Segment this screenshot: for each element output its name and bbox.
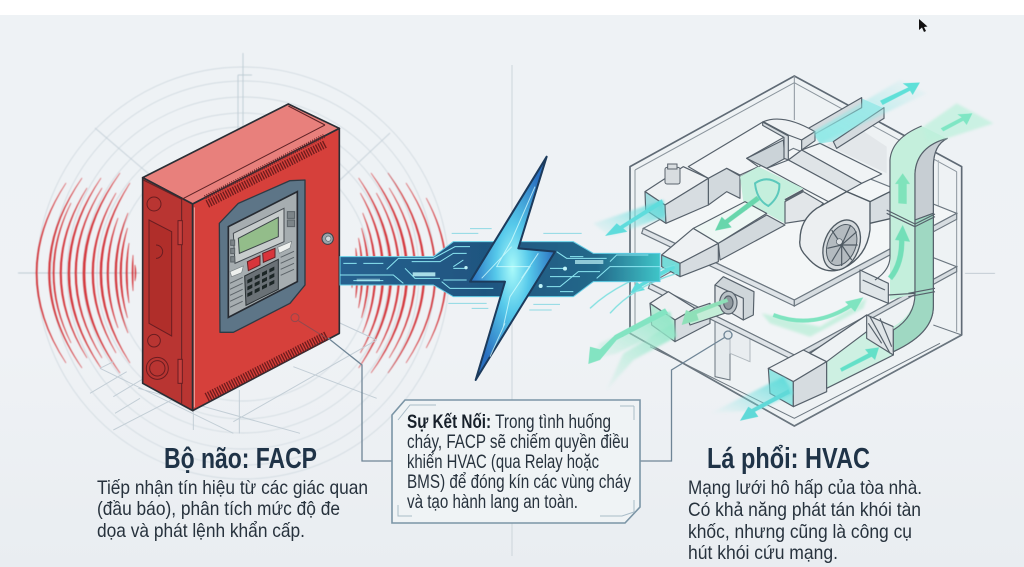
fire alarm control panel (FACP) [90, 104, 377, 433]
right description: Mạng lưới hô hấp của tòa nhà. [688, 477, 922, 499]
middle green duct section [740, 167, 823, 223]
lightning bolt [470, 157, 555, 380]
airflow arrows [588, 82, 972, 421]
white indicator pads [230, 241, 292, 277]
upper floor slab [642, 148, 957, 306]
side guide tick [965, 272, 995, 275]
right heading: HVAC: Lá phổi: HVAC [707, 443, 870, 475]
connector start [291, 314, 327, 338]
cabinet edge details [143, 106, 325, 407]
right description: Có khả năng phát tán khói tàn [688, 499, 921, 521]
spark dashes [448, 229, 582, 310]
side knockouts and label plate [146, 197, 182, 383]
damper and green ducts lower right [768, 270, 893, 407]
blower fan [800, 192, 892, 276]
bezel [219, 180, 305, 332]
keypad [245, 259, 278, 305]
vents [205, 136, 327, 397]
lower damper box and tube [650, 277, 754, 342]
main duct run on top [688, 122, 882, 205]
left description: (đầu báo), phân tích mức độ đe [97, 498, 340, 520]
supply duct center left [662, 202, 785, 277]
blueprint radar rings behind panel [18, 53, 449, 479]
isometric HVAC building [588, 76, 995, 426]
floor grid under panel [90, 317, 377, 433]
right description: khốc, nhưng cũng là công cụ [688, 521, 912, 543]
callout text: khiển HVAC (qua Relay hoặc [407, 452, 599, 473]
bottom floor and wall column [630, 320, 962, 426]
inner faceplate [228, 192, 297, 317]
red signal waves right [352, 173, 447, 373]
teal damper ring [755, 179, 779, 206]
red signal waves left [36, 173, 136, 373]
left description: Tiếp nhận tín hiệu từ các giác quan [97, 477, 368, 499]
upper-right outlet duct [763, 98, 884, 150]
right description: hút khói cứu mạng. [688, 542, 838, 564]
circuit traces [340, 247, 660, 292]
top-left exhaust duct [645, 167, 708, 223]
status slats [230, 212, 295, 307]
top face [143, 104, 339, 204]
left description: dọa và phát lệnh khẩn cấp. [97, 520, 305, 542]
left heading: FACP: Bộ não: FACP [164, 443, 317, 475]
control interface [219, 180, 305, 332]
LCD screen [238, 217, 278, 253]
mouse cursor [919, 19, 928, 32]
green and teal airflow swooshes [590, 80, 993, 413]
motor on duct [665, 164, 680, 184]
left description [97, 477, 368, 542]
callout text: và tạo hành lang an toàn. [407, 492, 578, 513]
middle floor slab [648, 203, 957, 361]
vertical green riser duct [875, 126, 947, 352]
callout text: cháy, FACP sẽ chiếm quyền điều [407, 432, 629, 453]
door lock [322, 233, 333, 244]
red buttons [247, 248, 275, 271]
left side face [143, 178, 193, 411]
callout text: BMS) để đóng kín các vùng cháy [407, 472, 631, 493]
connection data band [340, 229, 660, 310]
center vertical guide line [511, 65, 513, 556]
callout text: Sự Kết Nối: Trong tình huống [407, 412, 611, 433]
front door [193, 128, 339, 411]
callout text [407, 412, 631, 513]
right description [688, 477, 922, 564]
display housing [233, 208, 284, 263]
building shell [630, 76, 962, 426]
callout box [392, 400, 640, 523]
callout connector lines [328, 331, 732, 461]
